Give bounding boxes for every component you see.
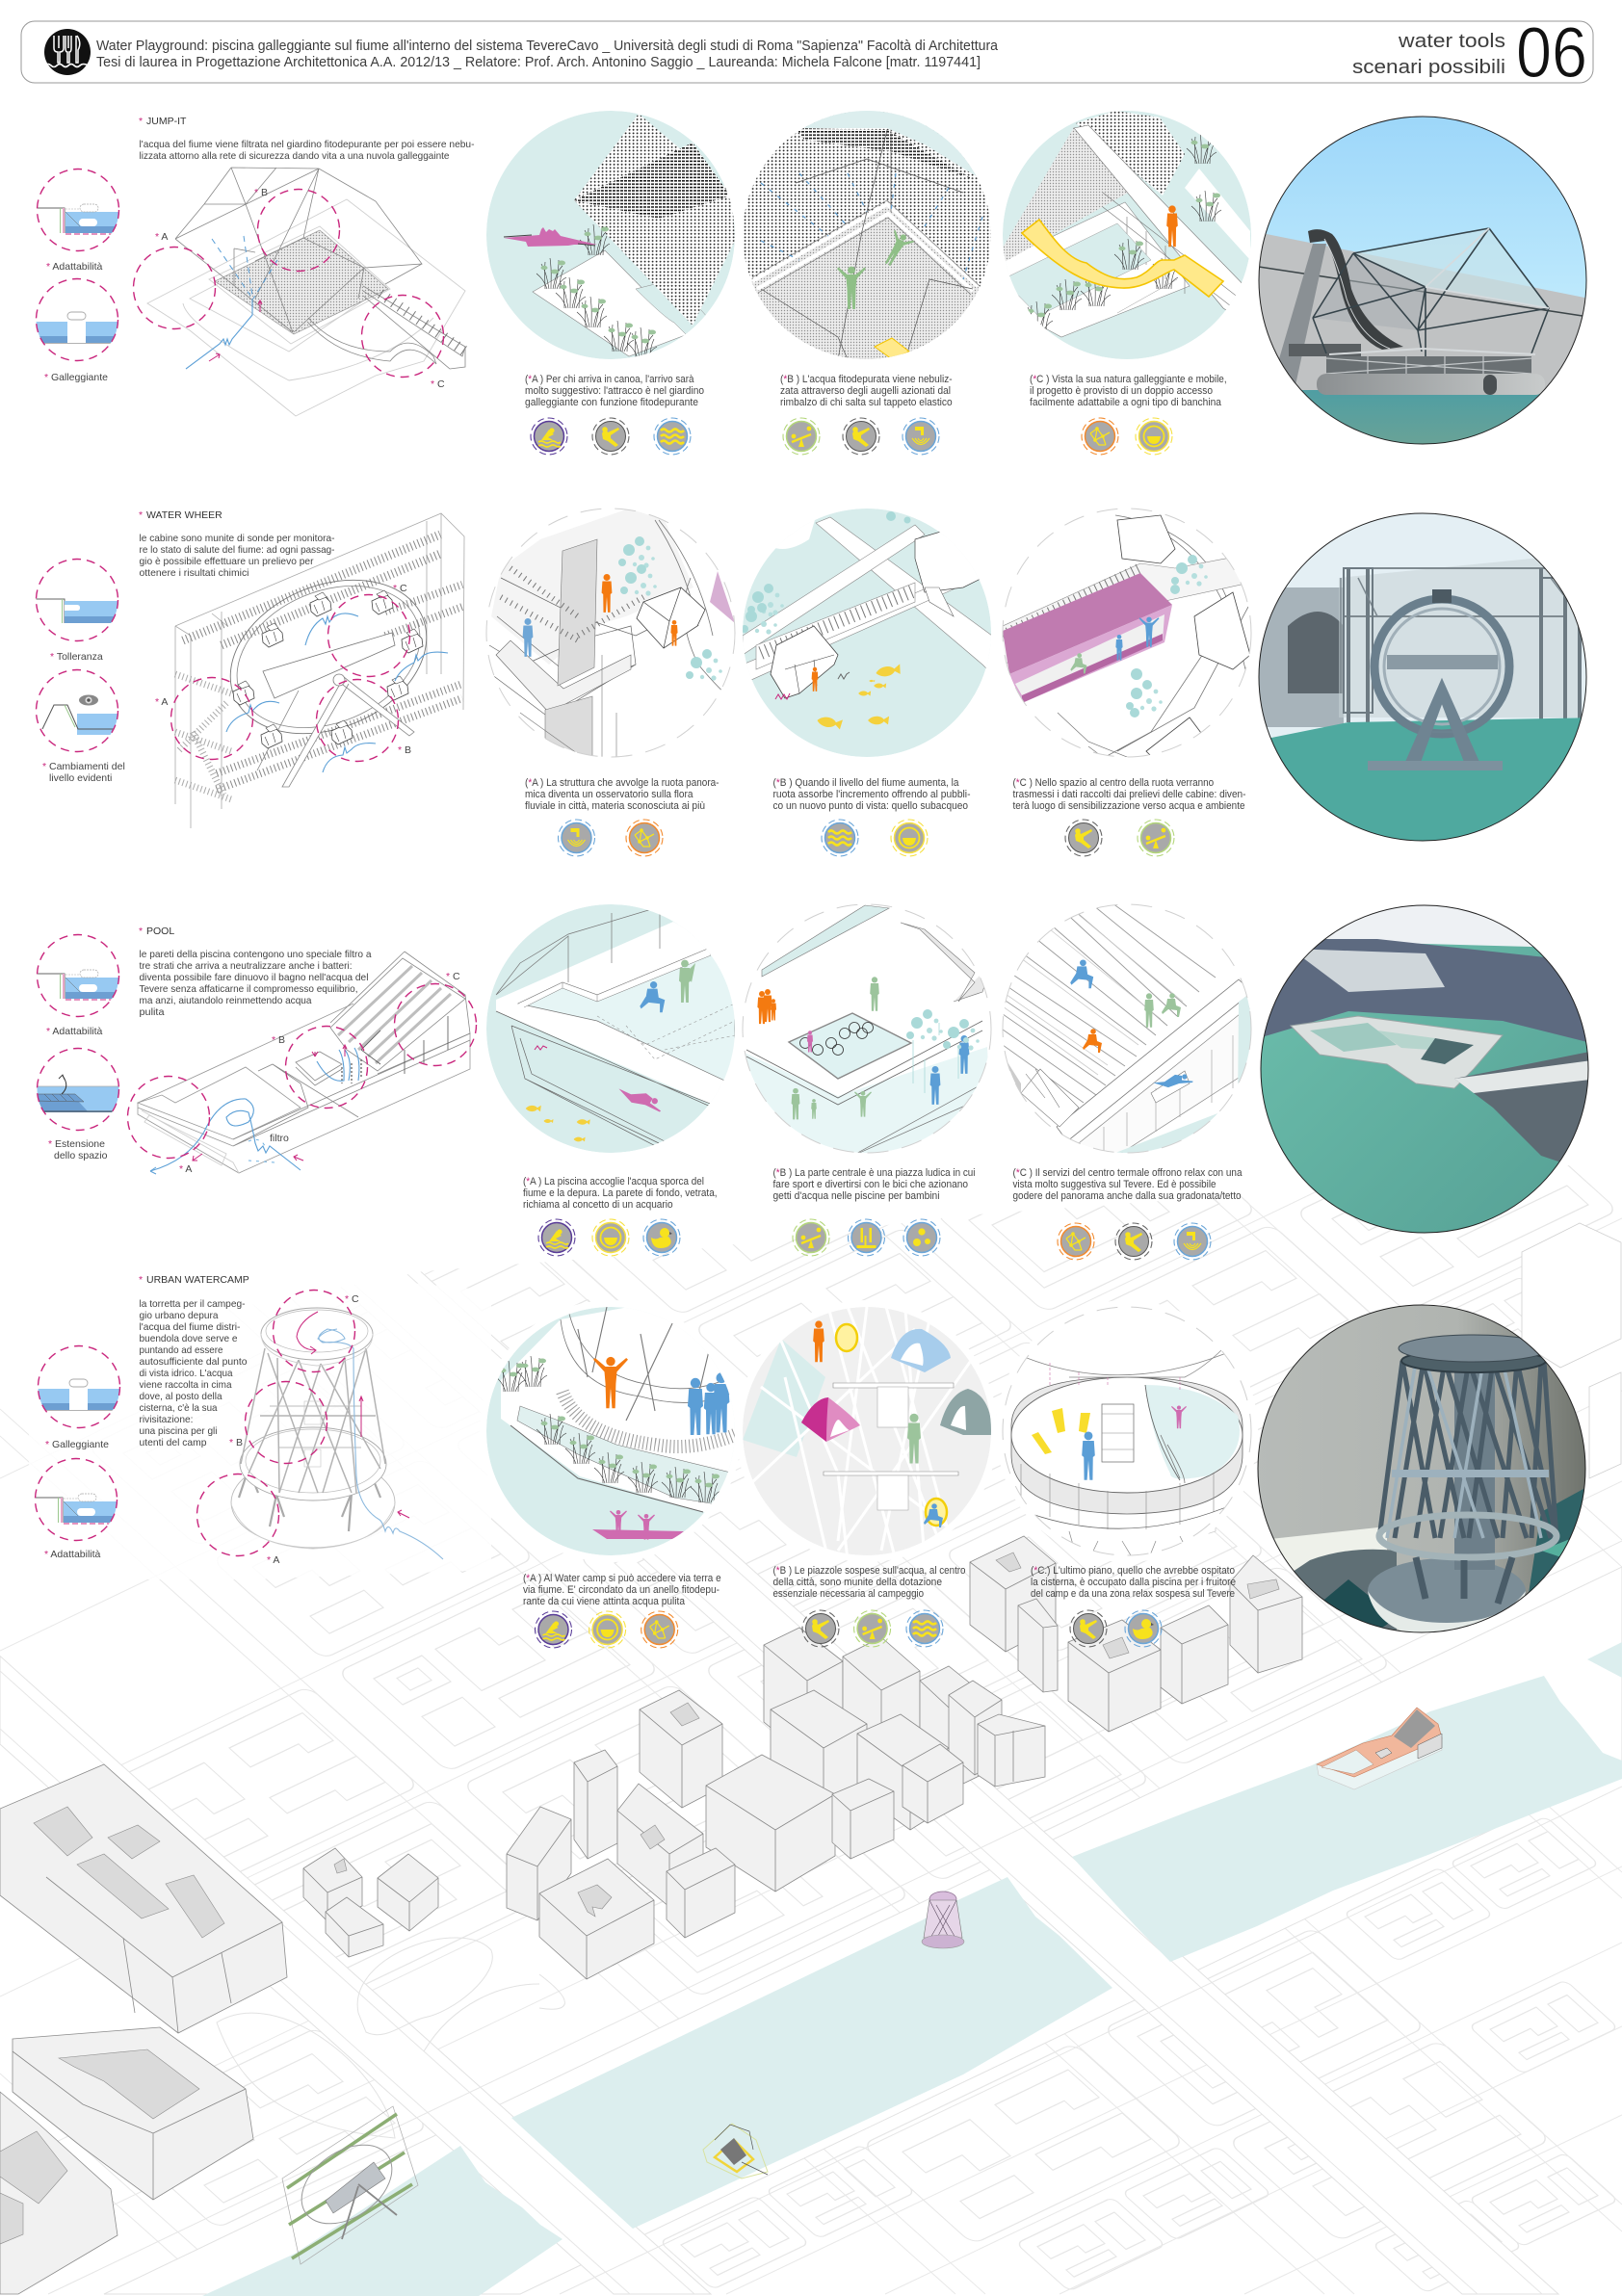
photo: jump-it render xyxy=(1252,111,1594,453)
text: watercamp description: di vista idrico. L'acqua xyxy=(139,1368,233,1379)
text: watercamp description: utenti del camp xyxy=(139,1437,207,1448)
panel: circle 1 caption C: (*C ) Vista la sua natura galleggiante e mobile, xyxy=(1030,374,1227,385)
text: watercamp description: rivisitazione: xyxy=(139,1414,193,1425)
diagram: wheel axonometric: * C xyxy=(393,583,407,594)
photo: pool render xyxy=(1262,905,1587,1233)
page number: 06 xyxy=(1516,13,1587,92)
white ground behind row 4 text and sketches xyxy=(29,1271,491,1579)
panel: circle 4 caption C: del camp e da una zona relax sospesa sul Tevere xyxy=(1031,1588,1235,1600)
text: watercamp description xyxy=(139,1298,248,1448)
white mask above map xyxy=(0,0,1622,1353)
panel: circle 1C slide and access xyxy=(1003,111,1252,359)
text: water wheel description: gio è possibile effettuare un prelievo per xyxy=(139,556,314,567)
text: water wheel description xyxy=(139,533,335,579)
river: Tevere water segments xyxy=(202,1642,1622,2296)
panel: circle 1 caption B xyxy=(780,374,953,408)
label: Adattabilità: * Adattabilità xyxy=(46,261,103,273)
text: jump-it description xyxy=(139,139,475,162)
panel: circle 2 caption B: ruota assorbe l'incremento offrendo al pubbli- xyxy=(772,789,971,800)
heading: WATER WHEER: WATER WHEER xyxy=(146,509,222,521)
icon: cambiamenti section xyxy=(37,670,118,751)
diagram: jump-it axonometric: * C xyxy=(431,378,445,390)
panel: circle 1 caption C: il progetto è provisto di un doppio accesso xyxy=(1030,385,1213,397)
panel: circle 3 caption A xyxy=(523,1176,717,1211)
icon: adattabilità section xyxy=(37,170,119,250)
outline: circle 4C dashed xyxy=(1003,1307,1251,1555)
panel: circle 3 caption C: (*C ) Il servizi del centro termale offrono relax con una xyxy=(1013,1167,1243,1179)
diagram: tower axonometric xyxy=(196,1291,443,1566)
outline: pool render xyxy=(1261,905,1588,1233)
panel: circle 3 caption A: richiama al concetto di un acquario xyxy=(523,1199,673,1211)
outline: circle 2C dashed xyxy=(1003,509,1251,757)
panel: circle 1 caption B: (*B ) L'acqua fitodepurata viene nebuliz- xyxy=(780,374,953,385)
outline: jump-it render xyxy=(1259,117,1586,444)
outline: circle 3B dashed xyxy=(743,904,991,1153)
panel: circle 3B playful square xyxy=(743,904,992,1156)
panel: circle 3 caption C xyxy=(1013,1167,1243,1202)
diagram: tower axonometric: * B xyxy=(229,1437,243,1448)
map model: jump-it on river xyxy=(703,2124,768,2179)
icon: estensione section xyxy=(37,1048,119,1131)
panel: circle 1 caption C: facilmente adattabile a ogni tipo di banchina xyxy=(1030,397,1222,408)
header heading: water tools: scenari possibili xyxy=(1352,57,1505,78)
header text: project description: Tesi di laurea in Progettazione Architettonica A.A. 2012/13 _ Relatore: Prof. Arch. Antonino Saggio _ Laureanda: Michela Falcone [matr. 1197441] xyxy=(96,55,981,70)
heading: JUMP-IT: JUMP-IT xyxy=(146,116,187,127)
panel: circle 2A observatory xyxy=(486,509,737,761)
text: watercamp description: cisterna, c'è la sua xyxy=(139,1402,218,1414)
label: Galleggiante: * Galleggiante xyxy=(45,1439,109,1450)
panel: circle 1A canoe arrival xyxy=(486,111,735,359)
map model: watercamp tower xyxy=(922,1892,964,1948)
text: pool description: pulita xyxy=(139,1006,165,1018)
text: pool description xyxy=(139,949,372,1018)
panel: circle 4 caption C: la cisterna, è occupato dalla piscina per i fruitore xyxy=(1031,1577,1236,1588)
panel: circle 3 caption C: vista molto suggestiva sul Tevere. Ed è possibile xyxy=(1013,1179,1216,1190)
panel: circle 3A pool aquarium xyxy=(486,904,735,1156)
heading: WATER WHEER: * xyxy=(139,509,143,521)
panel: JUMP-IT xyxy=(36,116,475,416)
text: watercamp description: l'acqua del fiume distri- xyxy=(139,1321,241,1333)
panel: circle 1 caption C xyxy=(1030,374,1227,408)
map: 3D buildings xyxy=(0,1223,1621,2294)
diagram: pool axonometric: * A xyxy=(179,1163,192,1175)
label: Cambiamenti del livello evidenti: * Cambiamenti del xyxy=(42,761,125,772)
panel: circle 3 caption B: getti d'acqua nelle piscine per bambini xyxy=(772,1190,940,1202)
panel: circle 2 caption C xyxy=(1013,777,1246,812)
panel: circle 4 caption B: della città, sono munite della dotazione xyxy=(772,1577,942,1588)
panel: circle 4 caption B: (*B ) Le piazzole sospese sull'acqua, al centro xyxy=(772,1565,965,1577)
text: pool description: tre strati che arriva a neutralizzare anche i batteri: xyxy=(139,960,353,972)
diagram: wheel axonometric: * B xyxy=(398,744,411,756)
outline: water wheel render xyxy=(1259,513,1586,841)
diagram: pool axonometric: * C xyxy=(446,971,460,982)
text: water wheel description: le cabine sono munite di sonde per monitora- xyxy=(139,533,335,544)
panel: circle 4 caption A: via fiume. E' circondato da un anello fitodepu- xyxy=(523,1584,719,1596)
panel: circle 2 caption C: (*C ) Nello spazio al centro della ruota verranno xyxy=(1013,777,1214,789)
panel: circle 3 caption B: fare sport e divertirsi con le bici che azionano xyxy=(772,1179,968,1190)
text: water wheel description: ottenere i risultati chimici xyxy=(139,567,249,579)
panel: circle 4 caption A: rante da cui viene attinta acqua pulita xyxy=(523,1596,686,1607)
panel: circle 2 caption B xyxy=(772,777,971,812)
panel: circle 2C sensitisation room xyxy=(1003,509,1251,770)
label: Cambiamenti del livello evidenti: livello evidenti xyxy=(49,772,112,784)
text: pool description: Tevere senza affaticarne il compromesso equilibrio, xyxy=(139,983,358,995)
diagram: pool axonometric xyxy=(127,952,476,1175)
diagram: wheel axonometric xyxy=(155,513,464,828)
text: watercamp description: viene raccolta in cima xyxy=(139,1379,232,1391)
icons: row 4 activities xyxy=(536,1610,1162,1648)
text: watercamp description: una piscina per gli xyxy=(139,1425,218,1437)
panel: circle 4 caption B xyxy=(772,1565,965,1600)
panel: POOL xyxy=(37,926,476,1175)
text: water wheel description: re lo stato di salute del fiume: ad ogni passag- xyxy=(139,544,335,556)
panel: circle 4B hanging tents xyxy=(743,1307,992,1560)
panel: circle 1 caption A: galleggiante con funzione fitodepurante xyxy=(525,397,698,408)
icon: galleggiante section xyxy=(38,1346,120,1427)
label: Estensione dello spazio: dello spazio xyxy=(54,1150,108,1161)
panel: circle 1 caption B: rimbalzo di chi salta sul tappeto elastico xyxy=(780,397,953,408)
panel: circle 1 caption A xyxy=(525,374,704,408)
text: watercamp description: la torretta per il campeg- xyxy=(139,1298,246,1310)
header heading: water tools xyxy=(1352,31,1505,78)
icons: row 1 activities xyxy=(531,418,1172,455)
panel: circle 3 caption A: fiume e la depura. La parete di fondo, vetrata, xyxy=(523,1187,717,1199)
icons: row 3 activities xyxy=(538,1219,1211,1260)
panel: circle 4C top-floor pool xyxy=(1011,1350,1243,1554)
panel: circle 2 caption A: (*A ) La struttura che avvolge la ruota panora- xyxy=(525,777,719,789)
text: watercamp description: buendola dove serve e xyxy=(139,1333,238,1344)
diagram: tower axonometric: * A xyxy=(267,1554,279,1566)
panel: circle 4A canoe and phyto ring xyxy=(486,1307,735,1555)
panel: circle 4 caption A: (*A ) Al Water camp si può accedere via terra e xyxy=(523,1573,721,1584)
photo: water wheel render xyxy=(1252,510,1599,848)
diagram: jump-it axonometric: * A xyxy=(155,231,168,243)
panel: URBAN WATERCAMP xyxy=(29,1271,491,1579)
icon: adattabilità section xyxy=(35,1458,118,1541)
panel: circle 4 caption C xyxy=(1031,1565,1236,1600)
panel: circle 4 caption C: (*C.) L'ultimo piano, quello che avrebbe ospitato xyxy=(1031,1565,1235,1577)
text: watercamp description: puntando ad essere xyxy=(139,1344,223,1356)
header: title bar xyxy=(21,13,1593,92)
label: Estensione dello spazio: * Estensione xyxy=(48,1138,105,1150)
map model: pool xyxy=(1317,1708,1442,1789)
label: Cambiamenti del livello evidenti xyxy=(42,761,125,784)
heading: JUMP-IT: * xyxy=(139,116,143,127)
text: pool description: ma anzi, aiutandolo reinmettendo acqua xyxy=(139,995,312,1006)
panel: circle 2 caption A: mica diventa un osservatorio sulla flora xyxy=(525,789,693,800)
icon: logo xyxy=(44,29,91,75)
panel: circle 3 caption C: godere del panorama anche dalla sua gradonata/tetto xyxy=(1013,1190,1241,1202)
white ground: row 4 circles xyxy=(480,1300,1258,1562)
panel: circle 1B trampoline net xyxy=(744,111,991,359)
text: watercamp description: dove, al posto della xyxy=(139,1391,222,1402)
heading: POOL: * xyxy=(139,926,143,937)
label: Tolleranza: * Tolleranza xyxy=(50,651,103,663)
outline: circle 2A dashed xyxy=(486,509,735,757)
map: street grid background xyxy=(0,700,1622,2294)
diagram: tower axonometric: * C xyxy=(345,1293,359,1305)
header heading: water tools: water tools xyxy=(1398,31,1505,52)
label: Estensione dello spazio xyxy=(48,1138,108,1161)
label: Adattabilità: * Adattabilità xyxy=(44,1549,101,1560)
heading: URBAN WATERCAMP: * xyxy=(139,1274,143,1286)
text: jump-it description: lizzata attorno alla rete di sicurezza dando vita a una nuvola galleggainte xyxy=(139,150,450,162)
panel: circle 1 caption B: zata attraverso degli augelli azionati dal xyxy=(780,385,951,397)
label: filtro: filtro xyxy=(270,1133,289,1144)
label: Adattabilità: * Adattabilità xyxy=(46,1026,103,1037)
panel: circle 1 caption A: (*A ) Per chi arriva in canoa, l'arrivo sarà xyxy=(525,374,694,385)
photo: watercamp tower render xyxy=(1252,1300,1594,1639)
panel: circle 3 caption A: (*A ) La piscina accoglie l'acqua sporca del xyxy=(523,1176,704,1187)
panel: circle 3 caption B: (*B ) La parte centrale è una piazza ludica in cui xyxy=(772,1167,975,1179)
diagram: jump-it axonometric: * B xyxy=(254,187,268,198)
outline: watercamp tower render xyxy=(1258,1305,1585,1632)
text: pool description: diventa possibile fare dinuovo il bagno nell'acqua del xyxy=(139,972,368,983)
panel: circle 4 caption B: essenziale necessaria al campeggio xyxy=(772,1588,924,1600)
heading: POOL: POOL xyxy=(146,926,174,937)
panel: circle 2B underwater view xyxy=(741,509,992,757)
panel: circle 3 caption B xyxy=(772,1167,975,1202)
header text: project description: Water Playground: piscina galleggiante sul fiume all'interno del sistema TevereCavo _ Università degli studi di Roma "Sapienza" Facoltà di Architettura xyxy=(96,39,999,54)
panel: WATER WHEER xyxy=(36,509,464,828)
text: pool description: le pareti della piscina contengono uno speciale filtro a xyxy=(139,949,372,960)
panel: circle 2 caption A xyxy=(525,777,719,812)
heading: URBAN WATERCAMP: URBAN WATERCAMP xyxy=(146,1274,249,1286)
panel: circle 1 caption A: molto suggestivo: l'attracco è nel giardino xyxy=(525,385,704,397)
panel: circle 3C spa terraces xyxy=(1003,903,1252,1156)
icon: galleggiante section xyxy=(36,279,118,360)
icon: tolleranza section xyxy=(36,559,118,641)
header text: project description xyxy=(96,39,999,70)
diagram: pool axonometric: * B xyxy=(272,1034,285,1046)
outline: circle 3C dashed xyxy=(1003,904,1251,1153)
panel: circle 2 caption B: co un nuovo punto di vista: quello subacqueo xyxy=(772,800,968,812)
diagram: jump-it axonometric xyxy=(133,168,465,416)
text: watercamp description: autosufficiente dal punto xyxy=(139,1356,248,1368)
panel: circle 2 caption A: fluviale in città, materia sconosciuta ai più xyxy=(525,800,705,812)
icons: row 2 activities xyxy=(559,820,1174,856)
panel: circle 2 caption B: (*B ) Quando il livello del fiume aumenta, la xyxy=(772,777,959,789)
text: watercamp description: gio urbano depura xyxy=(139,1310,219,1321)
panel: circle 2 caption C: terà luogo di sensibilizzazione verso acqua e ambiente xyxy=(1013,800,1244,812)
panel: circle 2 caption C: trasmessi i dati raccolti dai prelievi delle cabine: diven- xyxy=(1013,789,1246,800)
icon: adattabilità section xyxy=(37,934,119,1017)
diagram: wheel axonometric: * A xyxy=(155,696,168,708)
panel: circle 4 caption A xyxy=(523,1573,721,1607)
label: Galleggiante: * Galleggiante xyxy=(44,372,108,383)
map model: water wheel on river xyxy=(282,2106,418,2264)
text: jump-it description: l'acqua del fiume viene filtrata nel giardino fitodepurante per poi essere nebu- xyxy=(139,139,475,150)
